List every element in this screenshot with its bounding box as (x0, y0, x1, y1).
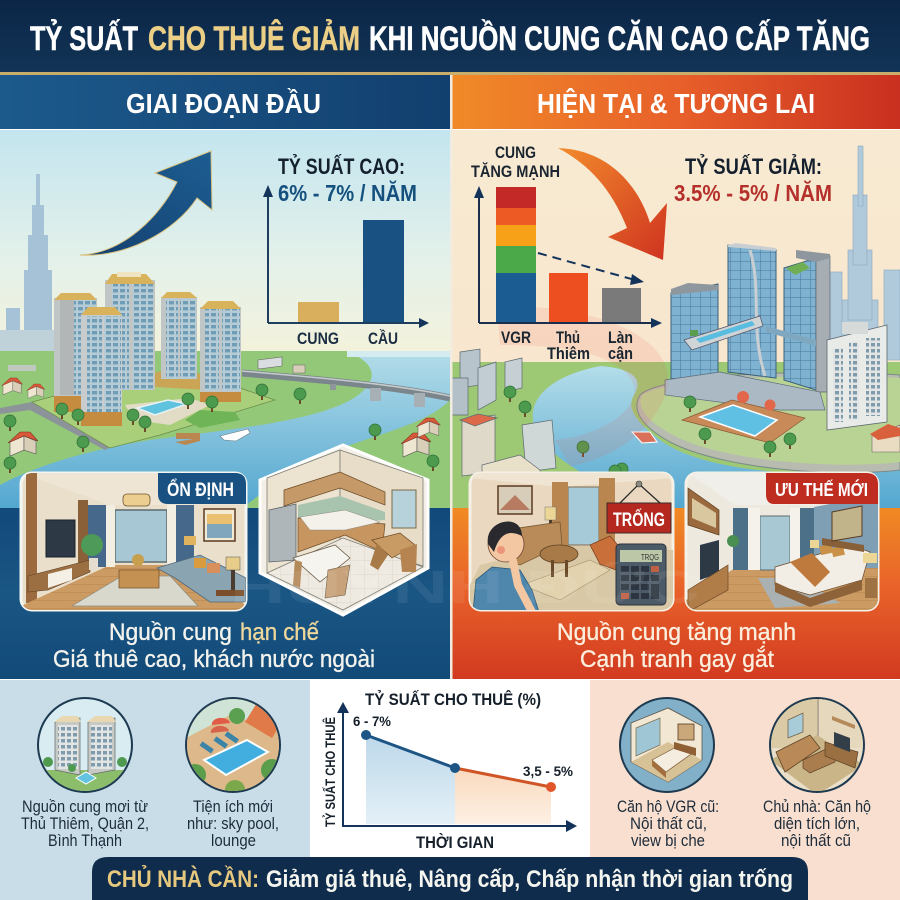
label: Thủ Thiêm: Thiêm (547, 344, 590, 363)
sky bridge (684, 316, 816, 350)
callout: chủ nhà cần: Giảm giá thuê, Nâng cấp, Chấp nhận thời gian trống (266, 866, 793, 893)
text: tiện ích mới: như: sky pool, (187, 814, 279, 833)
header: giai đoạn đầu (0, 75, 450, 129)
watermark: logo arc (497, 307, 668, 466)
text: căn hộ cũ: view bị che (631, 831, 705, 850)
text: căn hộ cũ: Căn hộ VGR cũ: (617, 797, 719, 816)
island (637, 372, 900, 473)
skyline (0, 174, 54, 351)
header: hiện tại và tương lai: HIỆN TẠI & TƯƠNG LAI (537, 88, 815, 119)
panel divider (450, 75, 452, 679)
text: nguồn cung mới (21, 797, 149, 850)
bar: cung (298, 302, 339, 322)
arrow: dashed trend (538, 253, 644, 285)
house right (872, 425, 900, 452)
label: Lân cận: Làn (608, 328, 633, 347)
text: chủ nhà căn hộ: Chủ nhà: Căn hộ (763, 797, 871, 816)
line chart: rent yield over time (321, 690, 577, 852)
text: tỷ suất cao: TỶ SUẤT CAO: (278, 154, 405, 179)
icon: old bedroom (620, 698, 714, 792)
tower group (54, 272, 241, 426)
line: early (366, 735, 455, 768)
line: current (455, 768, 551, 787)
panel: right orange base (452, 508, 900, 679)
badge: ưu thế mới: ƯU THẾ MỚI (775, 479, 868, 500)
tower D (161, 292, 197, 379)
label: Thủ Thiêm: Thủ (556, 328, 580, 347)
text: chủ nhà căn hộ (763, 797, 871, 850)
podium (31, 387, 276, 448)
text: tỷ suất cao: 6% - 7% / NĂM (278, 179, 417, 206)
x-axis label: THỜI GIAN (416, 833, 494, 852)
bar chart: cung cầu (263, 185, 429, 348)
tower C (81, 307, 122, 426)
arrow: rising rent yield (80, 151, 212, 255)
text: tỷ suất giảm: 3.5% - 5% / NĂM (674, 179, 832, 206)
icon: pool (184, 698, 283, 800)
text: nguồn cung tăng mạnh: Cạnh tranh gay gắt (580, 646, 774, 673)
text: chủ nhà căn hộ: diện tích lớn, (774, 814, 860, 833)
bar: Thủ Thiêm (549, 273, 588, 322)
tower E (200, 301, 241, 402)
arrow: falling rent yield (558, 148, 667, 260)
text: chủ nhà căn hộ: nội thất cũ (781, 831, 851, 850)
text: tiện ích mới (187, 797, 279, 850)
title bar: TỶ SUẤT (30, 20, 138, 58)
trees (4, 384, 439, 473)
panel: left blue base (0, 508, 450, 679)
pool (137, 400, 187, 415)
white tower (827, 322, 887, 430)
dock and boat (175, 429, 250, 445)
panel: old apartment factors (590, 680, 900, 900)
text: tiện ích mới: lounge (211, 831, 256, 850)
tower: right (784, 250, 830, 392)
label: cung tăng mạnh: CUNG (495, 143, 536, 162)
card: new bedroom (686, 473, 878, 612)
y-axis label: TỶ SUẤT CHO THUÊ (321, 717, 338, 827)
text: căn hộ cũ: Nội thất cũ, (630, 814, 707, 833)
panel: new supply factors (0, 680, 310, 900)
text: nguồn cung mới: Nguồn cung mơi từ (22, 797, 148, 816)
pool deck (682, 391, 805, 457)
text: tiện ích mới: Tiện ích mới (193, 797, 273, 816)
icon: old living room (770, 698, 864, 795)
text: tỷ suất giảm (674, 154, 832, 206)
sign: trống: TRỐNG (613, 509, 665, 531)
card: vacant apartment (470, 473, 673, 612)
label: VGR: VGR (501, 328, 531, 347)
icon: calculator (616, 544, 666, 605)
value: early: 6 - 7% (353, 713, 392, 729)
ground and river (452, 362, 900, 512)
chart title: TỶ SUẤT CHO THUÊ (%) (365, 690, 541, 709)
text: tỷ suất cao (278, 154, 417, 206)
title bar: CHO THUÊ GIẢM (148, 20, 360, 58)
bar: Lân cận (602, 288, 641, 322)
distant buildings (2, 357, 440, 457)
overpass bridge (242, 371, 450, 407)
text: nguồn cung hạn chế: Giá thuê cao, khách nước ngoài (53, 646, 375, 673)
value: current: 3,5 - 5% (523, 763, 574, 779)
bar chart: supply by area (471, 143, 662, 363)
river (0, 351, 450, 510)
bar: cầu (363, 220, 404, 322)
watermark: faint name: HUỲNH ĐỨC (230, 561, 700, 613)
text: căn hộ cũ (617, 797, 719, 850)
tower: left (671, 283, 718, 388)
text: nguồn cung hạn chế: hạn chế (240, 619, 320, 646)
sign: trống (607, 481, 671, 533)
panel: hiện tại scene (452, 129, 900, 512)
text: nguồn cung hạn chế: Nguồn cung (109, 619, 232, 646)
card: kitchen isometric (260, 445, 428, 615)
label: cung: CUNG (297, 329, 339, 348)
text: tỷ suất giảm: TỶ SUẤT GIẢM: (685, 154, 822, 179)
label: cầu: CẦU (368, 329, 398, 348)
text: nguồn cung mới: Thủ Thiêm, Quận 2, (21, 814, 149, 833)
text: nguồn cung tăng mạnh (557, 619, 796, 673)
text: nguồn cung hạn chế (53, 619, 375, 673)
icon: twin towers (38, 698, 132, 795)
panel: giai đoạn đầu scene (0, 129, 450, 511)
trees left (504, 386, 628, 481)
callout: chủ nhà cần: CHỦ NHÀ CẦN: (107, 864, 259, 893)
far skyline tower (828, 146, 900, 370)
card: living room (21, 473, 246, 612)
podium (665, 372, 825, 410)
modern towers (665, 243, 887, 430)
chart fill: early period (366, 735, 455, 824)
small left buildings (452, 349, 556, 490)
badge: ổn định: ỔN ĐỊNH (167, 479, 234, 501)
badge: ưu thế mới (766, 473, 878, 504)
person worried (473, 522, 539, 612)
tower A (54, 293, 97, 412)
icon: calculator: TRQG (641, 553, 659, 562)
bar: VGR stacked (496, 187, 536, 322)
text: nguồn cung tăng mạnh: Nguồn cung tăng mạnh (557, 619, 796, 646)
callout: chủ nhà cần (92, 857, 808, 900)
ground (0, 351, 450, 511)
label: cung tăng mạnh: TĂNG MẠNH (471, 162, 560, 181)
header: hiện tại và tương lai (452, 75, 900, 129)
panel: rent yield line chart (310, 680, 590, 900)
label: Lân cận (608, 328, 633, 363)
tower B (105, 272, 155, 390)
tower: center (728, 243, 776, 378)
chart fill: current period (455, 768, 551, 824)
title bar (0, 0, 900, 75)
header: giai đoạn đầu: GIAI ĐOẠN ĐẦU (126, 88, 321, 119)
badge: ổn định (158, 473, 246, 504)
label: Thủ Thiêm (547, 328, 590, 363)
text: nguồn cung mới: Bình Thạnh (48, 831, 122, 850)
road (0, 402, 115, 450)
label: cung tăng mạnh (471, 143, 560, 181)
boat (632, 432, 657, 443)
label: Lân cận: cận (608, 344, 633, 363)
